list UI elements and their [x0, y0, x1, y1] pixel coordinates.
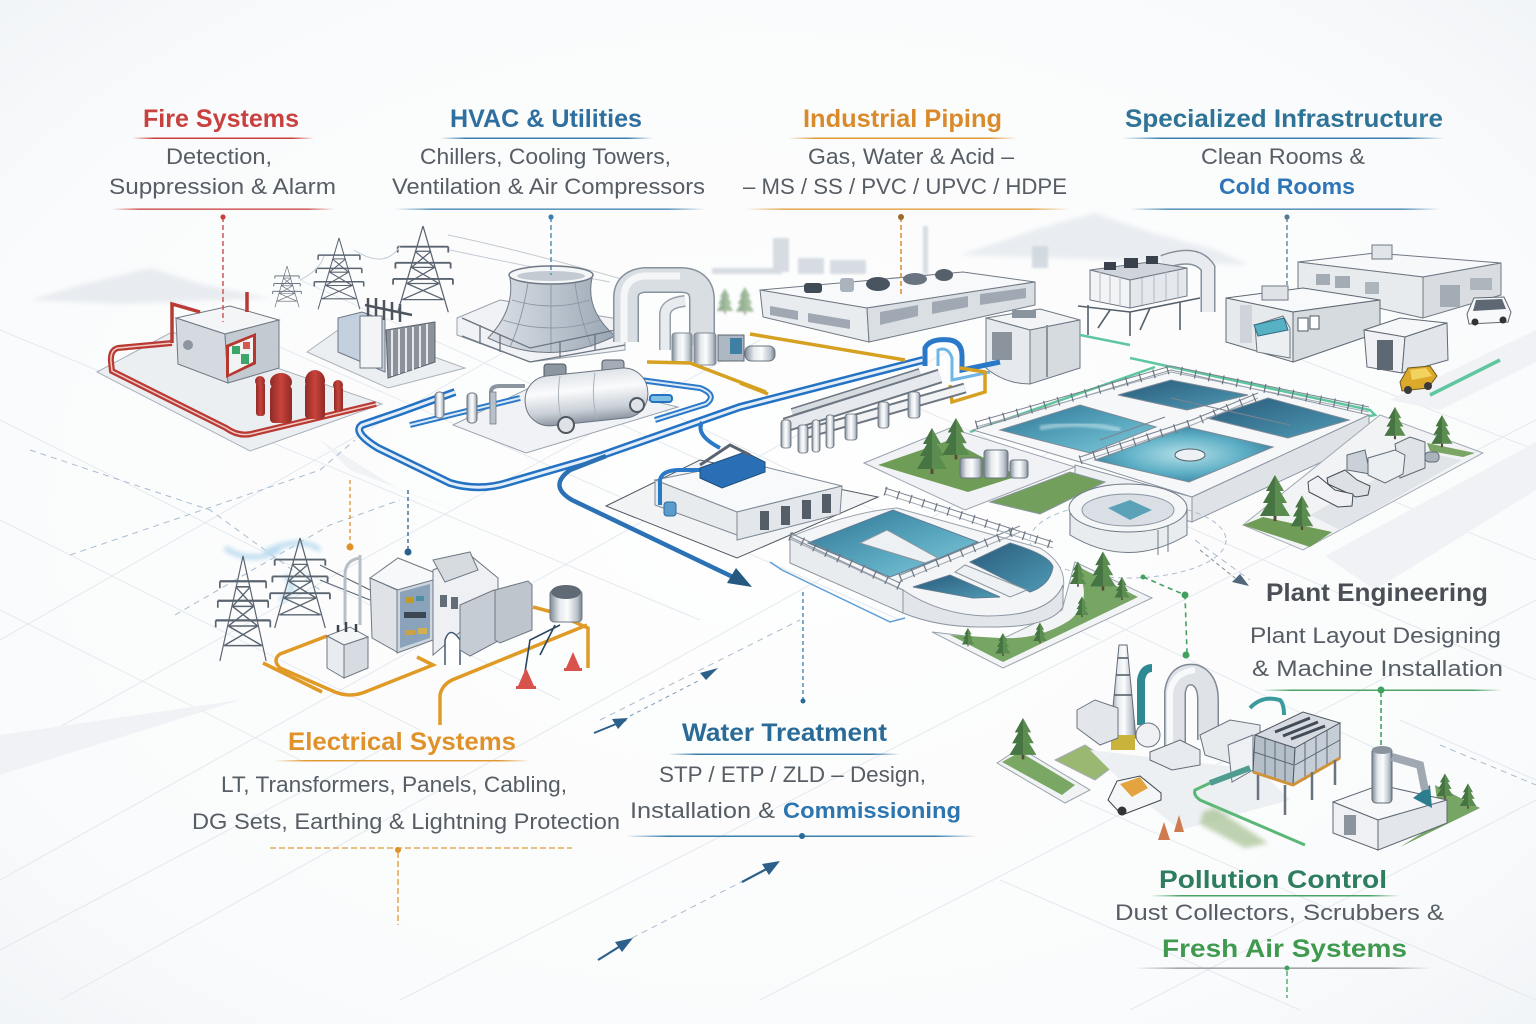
electrical wind swirls	[225, 543, 320, 600]
basin front wall left	[790, 537, 903, 613]
label: Industrial Piping: Industrial Piping	[803, 105, 1002, 133]
fresh air cylinder	[1372, 746, 1425, 803]
label: Fire Systems: Suppression & Alarm	[109, 174, 336, 199]
label: Water Treatment: Installation &	[630, 798, 775, 823]
side units	[1200, 720, 1260, 782]
basin front wall curved	[903, 585, 1063, 627]
main LT panel	[370, 558, 433, 653]
small garden bed	[1200, 808, 1268, 848]
basin A	[808, 510, 978, 577]
label: Pollution Control	[1115, 866, 1444, 998]
basin: right back	[1207, 398, 1349, 438]
label: Electrical Systems: LT, Transformers, Panels, Cabling,	[221, 772, 567, 797]
connector: plant engineering to pollution	[1380, 692, 1382, 745]
background: dashed site boundaries	[30, 440, 1536, 938]
label: Industrial Piping: – MS / SS / PVC / UPVC / HDPE	[743, 174, 1067, 199]
safety cones	[516, 652, 582, 689]
arrow near plant engineering	[1200, 550, 1249, 586]
connector: fire dashed	[222, 217, 224, 322]
green air duct line	[1195, 783, 1305, 845]
pipe manifold with blue and orange loops	[925, 340, 1000, 402]
label: HVAC & Utilities: HVAC & Utilities	[450, 105, 642, 133]
riser on cabinet	[172, 292, 247, 343]
orange gas lines	[647, 334, 905, 394]
air compressor tank	[435, 360, 672, 433]
connector: blue to electrical	[404, 490, 412, 556]
background: perspective ground grid	[0, 280, 1536, 1010]
label: Electrical Systems	[192, 728, 620, 925]
main treatment basins	[973, 366, 1369, 522]
cold room unit	[1364, 318, 1448, 373]
label: Plant Engineering: Plant Layout Designing	[1250, 623, 1501, 648]
large factory building	[760, 269, 1035, 342]
label: Specialized Infrastructure	[1122, 105, 1444, 220]
process skids	[1347, 437, 1439, 483]
lower basin fences	[790, 488, 1053, 589]
chiller tank cluster	[672, 333, 775, 365]
blue utility pipework upper loop	[410, 380, 711, 425]
fresh air building	[1333, 785, 1447, 850]
basin B rear	[970, 543, 1053, 592]
basin B front	[913, 575, 1000, 598]
cooling tower	[457, 266, 625, 362]
yellow forklift	[1400, 366, 1437, 394]
right pad with vehicles	[1243, 407, 1483, 550]
label: Pollution Control: Pollution Control	[1159, 866, 1387, 894]
service truck	[1108, 776, 1161, 816]
label: Fire Systems: Detection,	[166, 144, 272, 169]
label: Plant Engineering	[1250, 579, 1503, 694]
label: Electrical Systems: DG Sets, Earthing & Lightning Protection	[192, 809, 620, 834]
lower water basins	[770, 488, 1064, 627]
label: HVAC & Utilities: Chillers, Cooling Towers,	[420, 144, 671, 169]
air compressor plate	[453, 377, 678, 453]
flow arrow: upper dashed arrow pair	[594, 668, 718, 733]
label: Pollution Control: Dust Collectors, Scrubbers &	[1115, 900, 1444, 925]
mountains: right horizon	[960, 213, 1250, 265]
process boxes	[1077, 700, 1118, 745]
large ducting	[624, 276, 702, 350]
cooler block	[986, 309, 1080, 384]
basin: large centre aeration	[1095, 427, 1273, 482]
label: HVAC & Utilities	[392, 105, 705, 220]
blue pipe arrow to water treatment	[559, 456, 752, 587]
pylons behind yard	[273, 226, 625, 312]
label: Industrial Piping	[743, 105, 1070, 220]
fire control cabinet	[176, 306, 279, 383]
fire hydrants	[255, 370, 343, 423]
distant skyline	[712, 226, 1048, 274]
basin: upper left	[1000, 405, 1156, 453]
orange cable loops	[263, 607, 588, 725]
radiator banks	[460, 581, 532, 656]
teal yard line	[1430, 360, 1500, 395]
basin A walkway	[860, 530, 938, 563]
label: Plant Engineering: Plant Engineering	[1266, 579, 1488, 607]
small pines behind	[717, 287, 754, 315]
clean room building	[1226, 286, 1380, 362]
electrical systems zone	[216, 538, 588, 725]
basin deck	[790, 508, 1064, 620]
label: Water Treatment	[625, 719, 977, 839]
main scrubber duct	[1170, 670, 1208, 748]
label: Specialized Infrastructure: Cold Rooms	[1219, 174, 1355, 199]
green cooling utility line	[970, 335, 1375, 432]
lattice dust collector	[1253, 712, 1340, 815]
flow arrow: lower dashed arrow pair	[598, 861, 780, 960]
label: Water Treatment: Water Treatment	[682, 719, 888, 747]
process pipe outline	[770, 562, 905, 622]
fire systems zone	[97, 292, 382, 451]
connector: HVAC dashed	[550, 217, 552, 275]
rack support columns	[781, 392, 920, 453]
electrical transformer box	[327, 622, 368, 678]
label: HVAC & Utilities: Ventilation & Air Compressors	[392, 174, 705, 199]
label: Electrical Systems: Electrical Systems	[288, 728, 516, 756]
transformer yard	[307, 298, 465, 388]
rear building	[1298, 245, 1501, 318]
main blue header pipe	[359, 360, 923, 487]
label: Water Treatment: Commissioning	[783, 798, 961, 823]
central process building	[606, 422, 878, 558]
connector: piping dashed	[900, 217, 902, 295]
teal duct	[1141, 668, 1152, 725]
lawn with trees left of basins	[864, 418, 1105, 514]
label: Fire Systems	[109, 105, 336, 220]
connector: orange to electrical	[346, 480, 354, 550]
mountains: left horizon	[30, 268, 270, 304]
small cooling drum	[525, 585, 582, 672]
label: Plant Engineering: & Machine Installation	[1252, 656, 1503, 681]
control building	[433, 552, 498, 665]
label: Water Treatment: STP / ETP / ZLD – Design,	[659, 762, 926, 787]
connector: green plant engineering	[1140, 574, 1190, 658]
round clarifier	[1030, 484, 1226, 578]
fan casing	[1136, 723, 1160, 747]
fire plate	[97, 332, 382, 451]
label: Pollution Control: Fresh Air Systems	[1162, 935, 1407, 963]
connector: water treatment	[800, 592, 806, 704]
basin: upper back	[1118, 380, 1248, 410]
label: Industrial Piping: Gas, Water & Acid –	[808, 144, 1014, 169]
background: pale road bands	[0, 330, 1536, 775]
label: Fire Systems: Fire Systems	[143, 105, 299, 133]
connector: infrastructure dashed	[1286, 217, 1288, 285]
pipework beside transformer	[345, 555, 360, 625]
right lawn	[1400, 785, 1480, 847]
service vehicles	[1308, 470, 1370, 507]
lawn strip with trees	[932, 552, 1152, 668]
electrical pylons	[216, 556, 270, 661]
white car	[1467, 297, 1511, 326]
specialized cooling unit	[1078, 256, 1208, 336]
red fire main pipe	[111, 343, 376, 435]
label: Specialized Infrastructure: Specialized Infrastructure	[1125, 105, 1443, 133]
grey pipe rack	[785, 372, 965, 435]
basin fences	[976, 366, 1369, 462]
pollution control zone	[997, 645, 1480, 850]
scrubber base	[1150, 740, 1200, 770]
chimney stack	[1110, 645, 1136, 750]
label: Specialized Infrastructure: Clean Rooms &	[1201, 144, 1365, 169]
cones	[1158, 815, 1184, 840]
